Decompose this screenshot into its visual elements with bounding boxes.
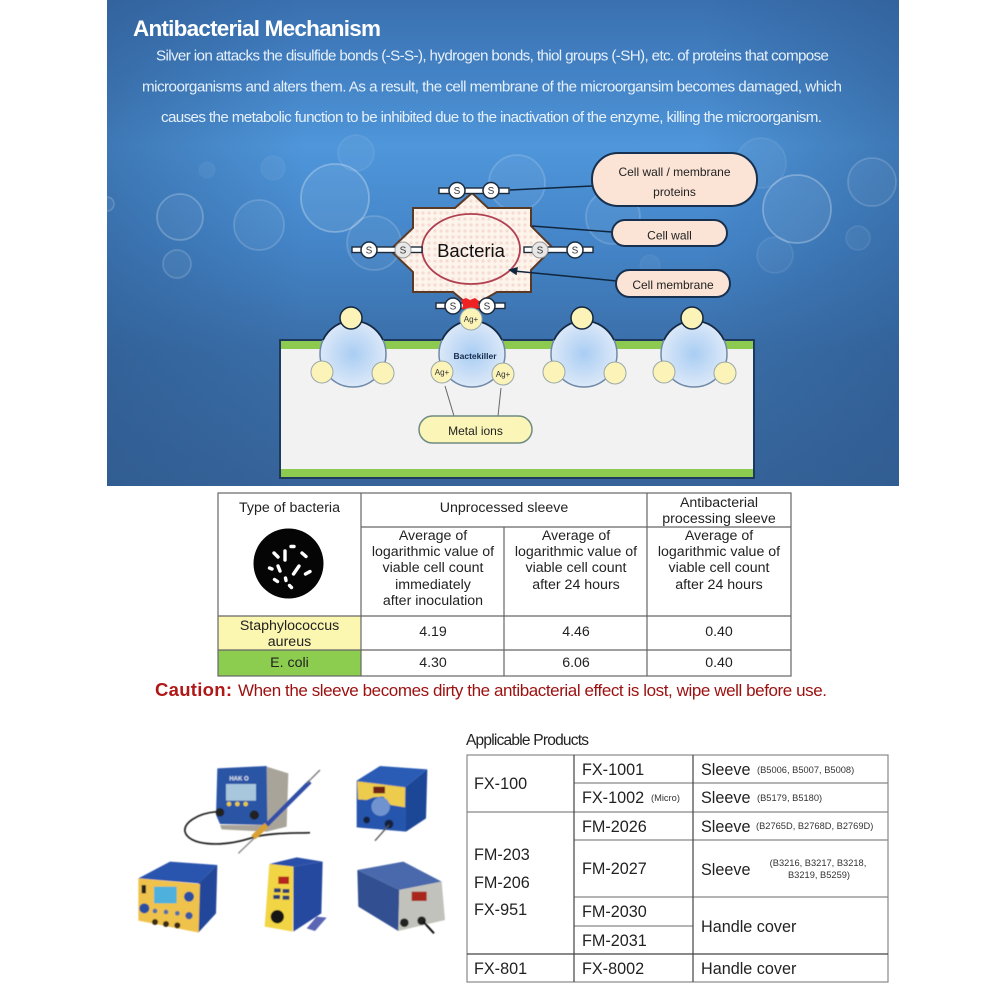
table text: Sleeve [701, 818, 750, 836]
table text: Handle cover [701, 960, 797, 978]
surface proteins with sulfur groups [352, 182, 593, 314]
header text: Type of bacteria [239, 500, 340, 516]
table text: Sleeve [701, 789, 750, 807]
right protein [524, 242, 593, 258]
top protein [439, 182, 509, 198]
table text: FM-206 [474, 874, 530, 892]
header text: viable cell count [526, 560, 627, 576]
caution note: Caution: [155, 679, 232, 700]
part numbers [651, 765, 873, 880]
header text: after inoculation [383, 593, 483, 609]
silver particle 1 [311, 307, 394, 387]
table text: FM-2027 [582, 860, 647, 878]
icon: FM-203 station [138, 862, 217, 933]
panel: antibacterial mechanism background [100, 0, 899, 486]
header text: Antibacterial [680, 495, 758, 511]
title: Antibacterial Mechanism [133, 16, 381, 41]
table text: FX-951 [474, 901, 527, 919]
callout: cell wall / membrane proteins: Cell wall / membrane [618, 165, 731, 179]
silver particle 2: bactekiller [431, 308, 514, 387]
header text: logarithmic value of [372, 544, 494, 560]
table text: FM-203 [474, 846, 530, 864]
table text [474, 761, 797, 978]
left protein: S [400, 246, 407, 256]
icon: FX-100 station with iron [185, 766, 320, 853]
callout: cell membrane: Cell membrane [632, 278, 714, 292]
callout: cell wall [612, 220, 727, 246]
header text: Staphylococcus [240, 618, 339, 634]
callout: metal ions: Metal ions [448, 424, 503, 438]
leader lines [510, 186, 617, 281]
icon: FX-801 station [357, 862, 445, 933]
sleeve cross-section [280, 340, 754, 478]
text block: mechanism description [142, 48, 842, 126]
right protein: S [537, 246, 544, 256]
header text: logarithmic value of [515, 544, 637, 560]
header text: 0.40 [705, 624, 733, 640]
part numbers: (Micro) [651, 793, 680, 803]
bacteria cell [390, 193, 553, 307]
header text [239, 495, 780, 671]
callout: cell membrane [616, 270, 730, 297]
table text: FM-2026 [582, 818, 647, 836]
header text: 4.46 [562, 624, 590, 640]
header text: immediately [395, 577, 472, 593]
row fills [218, 616, 361, 650]
bottom protein with broken bond [436, 298, 505, 314]
header text: viable cell count [383, 560, 484, 576]
applicable products heading: Applicable Products [466, 732, 589, 749]
header text: 0.40 [705, 655, 733, 671]
cell membrane [422, 214, 520, 284]
icon: bacteria petri dish [254, 528, 324, 598]
bottom protein with broken bond: S [450, 302, 457, 312]
product photos [138, 766, 445, 933]
grid [467, 755, 888, 982]
callout: cell wall / membrane proteins: proteins [653, 185, 696, 199]
header text: viable cell count [669, 560, 770, 576]
table text: Sleeve [701, 861, 750, 879]
header text: after 24 hours [532, 577, 620, 593]
header text: processing sleeve [662, 511, 776, 527]
right protein: S [572, 246, 579, 256]
header text: Unprocessed sleeve [440, 500, 568, 516]
table text: Handle cover [701, 918, 797, 936]
text block: mechanism description: causes the metabolic function to be inhibited due to the inactivation of the enzyme, killing the microorganism. [161, 109, 822, 126]
grid [218, 493, 791, 676]
callout: cell wall / membrane proteins [592, 153, 757, 206]
header text: Average of [542, 528, 610, 544]
header text: 6.06 [562, 655, 590, 671]
table text: FX-801 [474, 960, 527, 978]
icon: FX-951 station [265, 857, 327, 932]
silver particle 2: bactekiller: Ag+ [496, 370, 511, 379]
header text: 4.19 [419, 624, 447, 640]
part numbers: (B5179, B5180) [757, 793, 822, 803]
icon: FM-206 station [357, 766, 427, 841]
icon: FX-100 station with iron: HAK O [229, 777, 249, 783]
left protein: S [366, 246, 373, 256]
header text: Average of [685, 528, 753, 544]
silver particle 4 [653, 307, 736, 387]
table text: FM-2030 [582, 903, 647, 921]
header text: logarithmic value of [658, 544, 780, 560]
left protein [352, 242, 422, 258]
table text: Sleeve [701, 761, 750, 779]
header text: 4.30 [419, 655, 447, 671]
table text: FM-2031 [582, 932, 647, 950]
silver particle 2: bactekiller: Ag+ [464, 315, 479, 324]
table text: FX-1002 [582, 789, 644, 807]
top protein: S [454, 186, 461, 197]
applicable products table [467, 755, 888, 982]
silver particle 2: bactekiller: Ag+ [435, 368, 450, 377]
part numbers: (B5006, B5007, B5008) [757, 765, 854, 775]
bacteria results table [218, 493, 791, 676]
text block: mechanism description: Silver ion attacks the disulfide bonds (-S-S-), hydrogen bonds, thiol groups (-SH), etc. of proteins that compose [156, 48, 829, 64]
part numbers: (B2765D, B2768D, B2769D) [756, 821, 873, 831]
part numbers: (B3216, B3217, B3218, [770, 858, 866, 868]
silver particle 2: bactekiller: Bactekiller [454, 351, 497, 361]
header text: E. coli [270, 655, 309, 671]
part numbers: B3219, B5259) [788, 870, 850, 880]
callout: cell wall: Cell wall [647, 228, 692, 242]
callout: metal ions [419, 386, 532, 443]
silver particle 3 [543, 307, 626, 387]
bacteria label: Bacteria [437, 240, 506, 261]
header text: after 24 hours [675, 577, 763, 593]
table text: FX-1001 [582, 761, 644, 779]
text block: mechanism description: microorganisms and alters them. As a result, the cell membrane of the microorgansim becomes damaged, which [142, 78, 842, 96]
top protein: S [488, 186, 495, 197]
caution note: When the sleeve becomes dirty the antibacterial effect is lost, wipe well before use. [238, 681, 827, 700]
table text: FX-100 [474, 775, 527, 793]
header text: aureus [268, 634, 311, 650]
table text: FX-8002 [582, 960, 644, 978]
header text: Average of [399, 528, 467, 544]
cell wall shape [390, 193, 553, 307]
bottom protein with broken bond: S [484, 302, 491, 312]
